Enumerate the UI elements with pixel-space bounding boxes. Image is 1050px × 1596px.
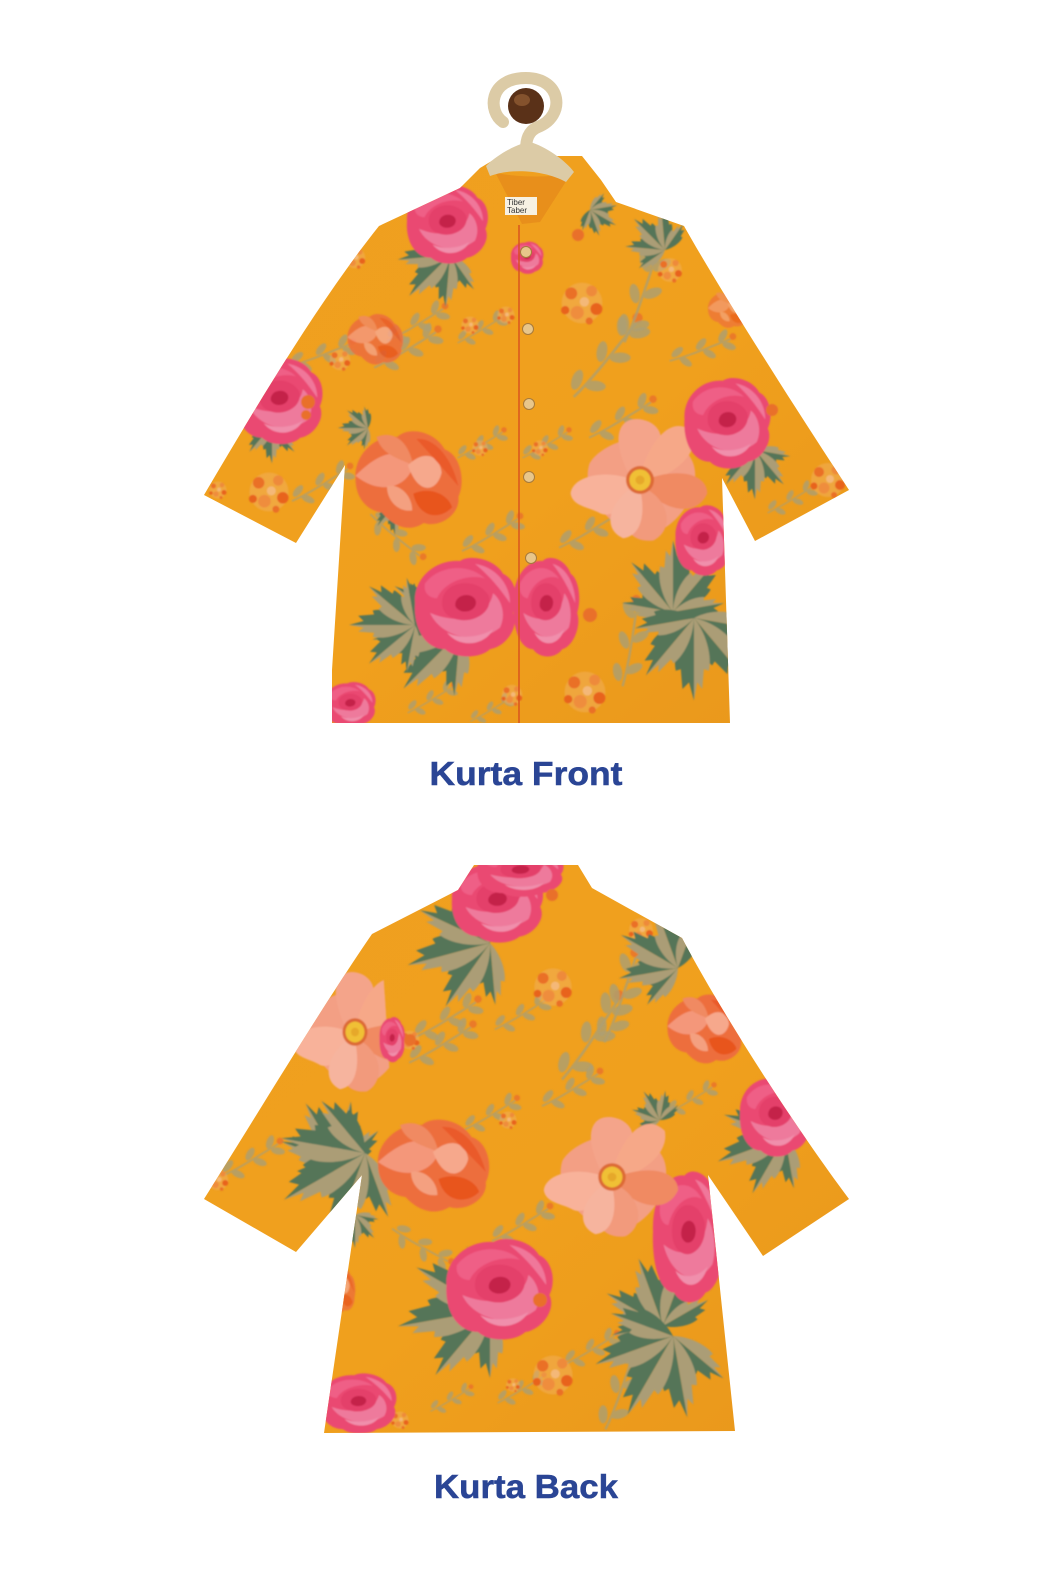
kurta back garment bbox=[204, 846, 849, 1448]
back of neck opening bbox=[495, 172, 572, 224]
front fabric body bbox=[204, 156, 849, 723]
back fabric body bbox=[204, 865, 849, 1433]
caption: Kurta Back: Kurta Back bbox=[434, 1468, 619, 1505]
hanger bbox=[494, 78, 556, 150]
brand label bbox=[505, 197, 537, 215]
buttons bbox=[520, 246, 536, 564]
brand label: Tiber bbox=[507, 198, 525, 207]
caption: Kurta Front: Kurta Front bbox=[430, 755, 623, 792]
kurta front garment bbox=[204, 142, 849, 727]
hanger shoulder bar bbox=[486, 142, 574, 182]
back floral print bbox=[208, 846, 814, 1448]
front floral print bbox=[209, 185, 845, 727]
infographic canvas bbox=[204, 72, 849, 1498]
brand label: Taber bbox=[507, 206, 527, 215]
button placket bbox=[518, 225, 520, 723]
